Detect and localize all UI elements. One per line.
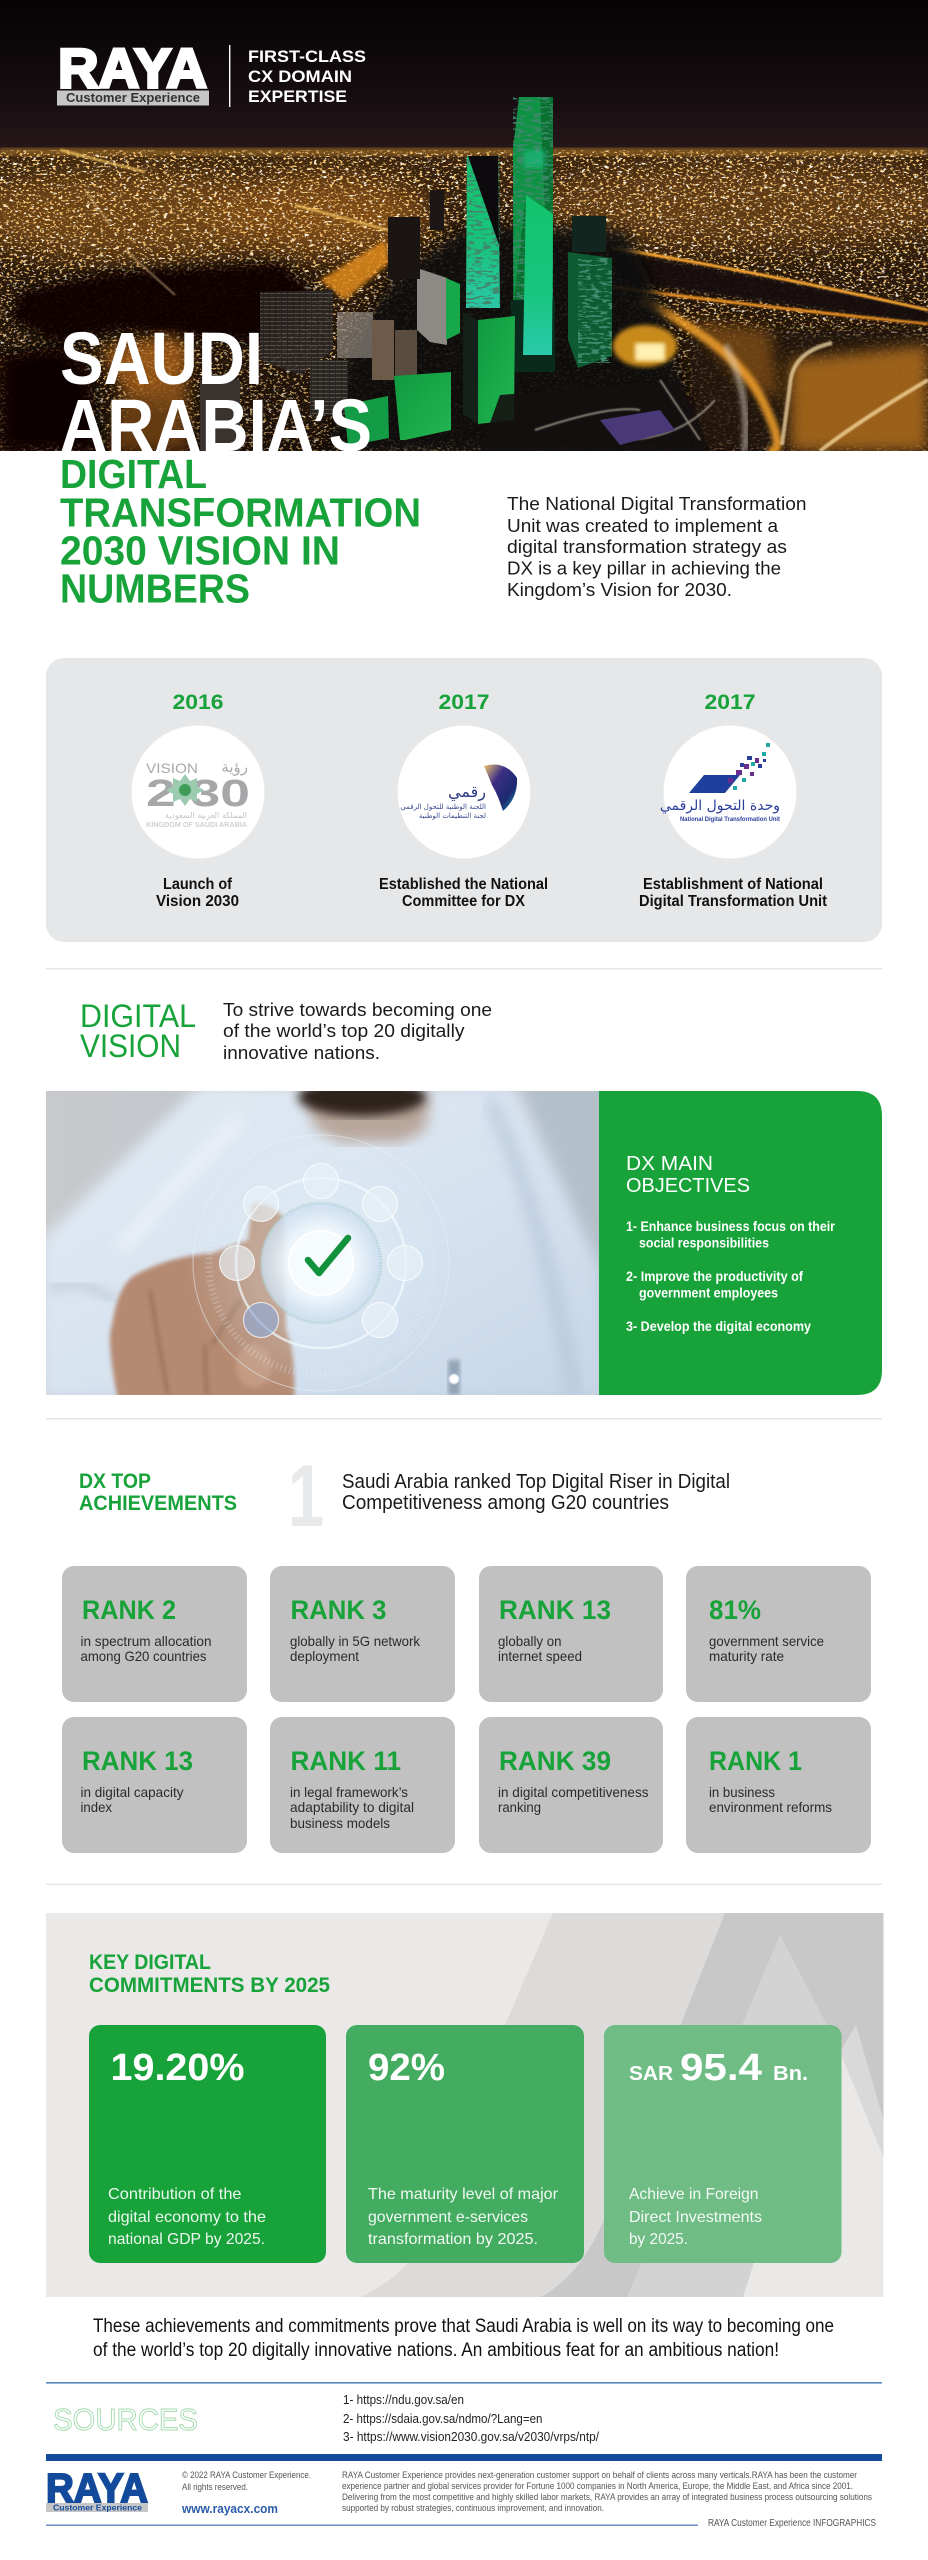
heading: DX top achievements: ACHIEVEMENTS (79, 1492, 237, 1515)
heading: key digital commitments: KEY DIGITAL (89, 1951, 211, 1974)
card: rank 11 legal: RANK 11 (290, 1746, 401, 1776)
objectives heading (626, 1153, 750, 1197)
objectives list: 3- Develop the digital economy (626, 1318, 811, 1334)
icon: Vision 2030 logo: KINGDOM OF SAUDI ARABIA (146, 822, 247, 829)
card: 81% maturity: government service (709, 1633, 824, 1649)
title: Saudi Arabia's: SAUDI (60, 317, 263, 400)
card: SAR 95.4 Bn: Bn. (773, 2063, 808, 2085)
card: rank 1 business: in business (709, 1784, 775, 1800)
card: rank 2 spectrum (62, 1566, 247, 1702)
copyright: © 2022 RAYA Customer Experience. (182, 2470, 311, 2480)
card: 19.20% GDP (89, 2025, 326, 2263)
card: SAR 95.4 Bn: by 2025. (629, 2231, 688, 2248)
card: rank 13 internet speed (479, 1566, 663, 1702)
heading: digital vision: DIGITAL (80, 998, 196, 1034)
milestone 2017 unit: 2017 (704, 691, 756, 714)
subtitle: digital transformation: DIGITAL (60, 451, 207, 497)
card: 19.20% GDP: national GDP by 2025. (108, 2231, 265, 2248)
card: 19.20% GDP: digital economy to the (108, 2209, 266, 2226)
heading: DX top achievements: DX TOP (79, 1470, 151, 1493)
card: rank 13 internet speed: globally on (498, 1633, 562, 1649)
card: rank 3 5G: RANK 3 (290, 1595, 386, 1625)
heading: sources: SOURCES (53, 2402, 198, 2437)
card: rank 11 legal: business models (290, 1815, 390, 1831)
big numeral 1: 1 (288, 1446, 324, 1545)
card: rank 13 capacity: RANK 13 (82, 1746, 193, 1776)
footer logo: RAYA Customer Experience: RAYA (46, 2465, 148, 2511)
icon: Vision 2030 logo: رؤية (221, 758, 248, 776)
card: rank 11 legal: in legal framework’s (290, 1784, 408, 1800)
icon: Raqmi committee logo: لجنة التنظيمات الوطنية (419, 812, 486, 820)
milestone text: Launch of (163, 876, 233, 893)
intro paragraph: The National Digital Transformation (507, 494, 806, 514)
card: rank 1 business: environment reforms (709, 1799, 832, 1815)
card: rank 13 capacity (62, 1717, 247, 1853)
objectives list (626, 1218, 835, 1334)
milestone 2017 committee (379, 691, 548, 910)
icon: National Digital Transformation Unit logo: وحدة التحول الرقمي (660, 798, 780, 814)
figure in white thobe (40, 1078, 610, 1400)
card: rank 39 competitiveness: ranking (498, 1799, 541, 1815)
title: Saudi Arabia's: ARABIA’S (60, 384, 372, 467)
hand (110, 1204, 294, 1400)
closing statement (93, 2316, 834, 2361)
top achievement statement: Competitiveness among G20 countries (342, 1492, 669, 1514)
milestone text: Digital Transformation Unit (639, 893, 827, 910)
tagline with divider: EXPERTISE (248, 87, 347, 106)
subtitle: digital transformation: 2030 VISION IN (60, 528, 340, 574)
centre bright panel (510, 300, 555, 372)
lower green block (394, 372, 451, 440)
card: rank 13 internet speed: internet speed (498, 1648, 582, 1664)
card: 81% maturity: maturity rate (709, 1648, 784, 1664)
panel: key digital commitments (46, 1913, 884, 2297)
card: rank 2 spectrum: in spectrum allocation (80, 1633, 212, 1649)
card: rank 1 business: RANK 1 (709, 1746, 802, 1776)
heading: digital vision: VISION (80, 1028, 181, 1064)
sources list (343, 2392, 599, 2444)
objectives list: 1- Enhance business focus on their (626, 1218, 835, 1234)
interface overlay (186, 1128, 456, 1398)
icon: Vision 2030 logo (146, 758, 250, 829)
card: rank 39 competitiveness (479, 1717, 663, 1853)
objectives heading: DX MAIN (626, 1153, 713, 1175)
photo: man touching digital interface (40, 1078, 610, 1400)
milestone 2017 committee: 2017 (438, 691, 490, 714)
subtitle: digital transformation: NUMBERS (60, 566, 250, 612)
milestone text: Vision 2030 (156, 893, 239, 910)
digital vision text: innovative nations. (223, 1043, 380, 1063)
hero photo: Riyadh skyline at night (0, 0, 928, 451)
company description: Delivering from the most competitive and highly skilled labor markets, RAYA provides an array of integrated business process outsourcing solutions (342, 2492, 872, 2502)
intro paragraph: Unit was created to implement a (507, 516, 779, 536)
card: SAR 95.4 Bn: Direct Investments (629, 2209, 762, 2226)
left teal tower (466, 156, 500, 308)
heading: key digital commitments (89, 1951, 330, 1997)
card: rank 3 5G: globally in 5G network (290, 1633, 421, 1649)
card: 92% maturity: government e-services (368, 2209, 528, 2226)
card: SAR 95.4 Bn: 95.4 (680, 2047, 762, 2089)
card: 81% maturity (686, 1566, 871, 1702)
icon: Vision 2030 logo: 2 30 (146, 773, 250, 815)
icon: Vision 2030 logo: VISION (146, 760, 198, 776)
dark river band and highways, right (612, 248, 928, 451)
digital vision text (223, 1000, 492, 1063)
icon: Raqmi committee logo: رقمي (448, 782, 486, 802)
icon: Raqmi committee logo: اللجنة الوطنية للتحول الرقمي (400, 803, 486, 811)
card: 92% maturity: transformation by 2025. (368, 2231, 538, 2248)
card: SAR 95.4 Bn: SAR (629, 2063, 674, 2085)
closing statement: These achievements and commitments prove that Saudi Arabia is well on its way to becoming one (93, 2316, 834, 2337)
card: rank 39 competitiveness: in digital competitiveness (498, 1784, 648, 1800)
card: rank 13 internet speed: RANK 13 (499, 1595, 611, 1625)
website: www.rayacx.com (181, 2501, 278, 2516)
intro paragraph: DX is a key pillar in achieving the (507, 558, 781, 578)
objectives heading: OBJECTIVES (626, 1175, 750, 1197)
card: SAR 95.4 Bn: Achieve in Foreign (629, 2186, 758, 2203)
sources list: 3- https://www.vision2030.gov.sa/v2030/vrps/ntp/ (343, 2429, 599, 2444)
icon: National Digital Transformation Unit logo (660, 743, 780, 823)
title: Saudi Arabia's (60, 317, 372, 467)
card: 19.20% GDP: Contribution of the (108, 2186, 242, 2203)
lit dome (613, 325, 677, 367)
tower cluster base shadow (330, 225, 700, 451)
card: 19.20% GDP: 19.20% (110, 2047, 244, 2089)
card: rank 39 competitiveness: RANK 39 (499, 1746, 611, 1776)
grey foreground buildings (260, 290, 333, 375)
horizon glow (0, 148, 928, 156)
footer tag: RAYA Customer Experience INFOGRAPHICS (708, 2518, 876, 2529)
company description (342, 2470, 872, 2513)
card: 92% maturity: The maturity level of major (368, 2186, 559, 2203)
subtitle: digital transformation: TRANSFORMATION (60, 490, 421, 536)
milestone 2017 unit (639, 691, 827, 910)
milestone text (639, 876, 827, 910)
tall tower (513, 97, 553, 300)
card: rank 3 5G: deployment (290, 1648, 359, 1664)
objectives list: government employees (639, 1284, 778, 1300)
milestone text (379, 876, 548, 910)
logo: RAYA Customer Experience (white): RAYA (58, 36, 207, 100)
card: rank 2 spectrum: among G20 countries (80, 1648, 206, 1664)
card: rank 13 capacity: index (80, 1799, 112, 1815)
card: rank 11 legal: adaptability to digital (290, 1799, 414, 1815)
plaza lights (480, 380, 710, 451)
card: rank 1 business (686, 1717, 871, 1853)
panel: timeline milestones (46, 658, 882, 942)
heading: DX top achievements (79, 1470, 237, 1515)
heading: digital vision (80, 998, 196, 1064)
top achievement statement: Saudi Arabia ranked Top Digital Riser in Digital (342, 1471, 730, 1493)
copyright: All rights reserved. (182, 2482, 248, 2492)
tagline with divider: CX DOMAIN (248, 67, 352, 86)
heading: key digital commitments: COMMITMENTS BY 2025 (89, 1974, 330, 1997)
digital vision text: of the world’s top 20 digitally (223, 1021, 464, 1041)
sources list: 1- https://ndu.gov.sa/en (343, 2392, 464, 2407)
tagline with divider (229, 45, 366, 107)
card: rank 3 5G (270, 1566, 455, 1702)
digital vision text: To strive towards becoming one (223, 1000, 492, 1020)
company description: supported by robust strategies, continuous improvement, and innovation. (342, 2503, 604, 2513)
top achievement statement (342, 1471, 730, 1514)
card: rank 11 legal (270, 1717, 455, 1853)
card: 92% maturity (346, 2025, 584, 2263)
logo: RAYA Customer Experience (white): Customer Experience (66, 90, 200, 105)
card: SAR 95.4 Bn (604, 2025, 842, 2263)
subtitle: digital transformation (60, 451, 421, 612)
card: 92% maturity: 92% (368, 2047, 445, 2089)
milestone text (156, 876, 239, 910)
objectives list: 2- Improve the productivity of (626, 1268, 803, 1284)
intro paragraph: Kingdom’s Vision for 2030. (507, 580, 732, 600)
sources list: 2- https://sdaia.gov.sa/ndmo/?Lang=en (343, 2411, 542, 2426)
milestone text: Committee for DX (402, 893, 526, 910)
green front block (463, 312, 478, 424)
panel: DX main objectives (599, 1091, 882, 1395)
footer logo: RAYA Customer Experience: Customer Experience (53, 2502, 142, 2512)
intro paragraph (507, 494, 806, 600)
icon: Raqmi committee logo (400, 764, 517, 820)
card: rank 13 capacity: in digital capacity (80, 1784, 184, 1800)
card: rank 2 spectrum: RANK 2 (82, 1595, 176, 1625)
milestone 2016: 2016 (172, 691, 224, 714)
lit roads and districts, left (60, 150, 395, 451)
card: 81% maturity: 81% (709, 1595, 761, 1625)
objectives list: social responsibilities (639, 1234, 769, 1250)
icon: check mark (308, 1238, 348, 1273)
milestone text: Establishment of National (643, 876, 823, 893)
copyright (182, 2470, 311, 2492)
company description: experience partner and global services provider for Fortune 1000 companies in North America, Europe, the Middle East, and Africa since 2001. (342, 2481, 853, 2491)
dark ground areas (0, 262, 320, 451)
intro paragraph: digital transformation strategy as (507, 537, 787, 557)
closing statement: of the world’s top 20 digitally innovative nations. An ambitious feat for an ambitious nation! (93, 2340, 779, 2361)
tagline with divider: FIRST-CLASS (248, 47, 366, 66)
right tower (572, 216, 606, 252)
icon: National Digital Transformation Unit logo: National Digital Transformation Unit (680, 817, 780, 823)
icon: Vision 2030 logo: المملكة العربية السعودية (165, 811, 247, 820)
company description: RAYA Customer Experience provides next-generation customer support on behalf of clients across many verticals.RAYA has been the customer (342, 2470, 857, 2480)
milestone 2016 (132, 691, 264, 910)
milestone text: Established the National (379, 876, 548, 893)
